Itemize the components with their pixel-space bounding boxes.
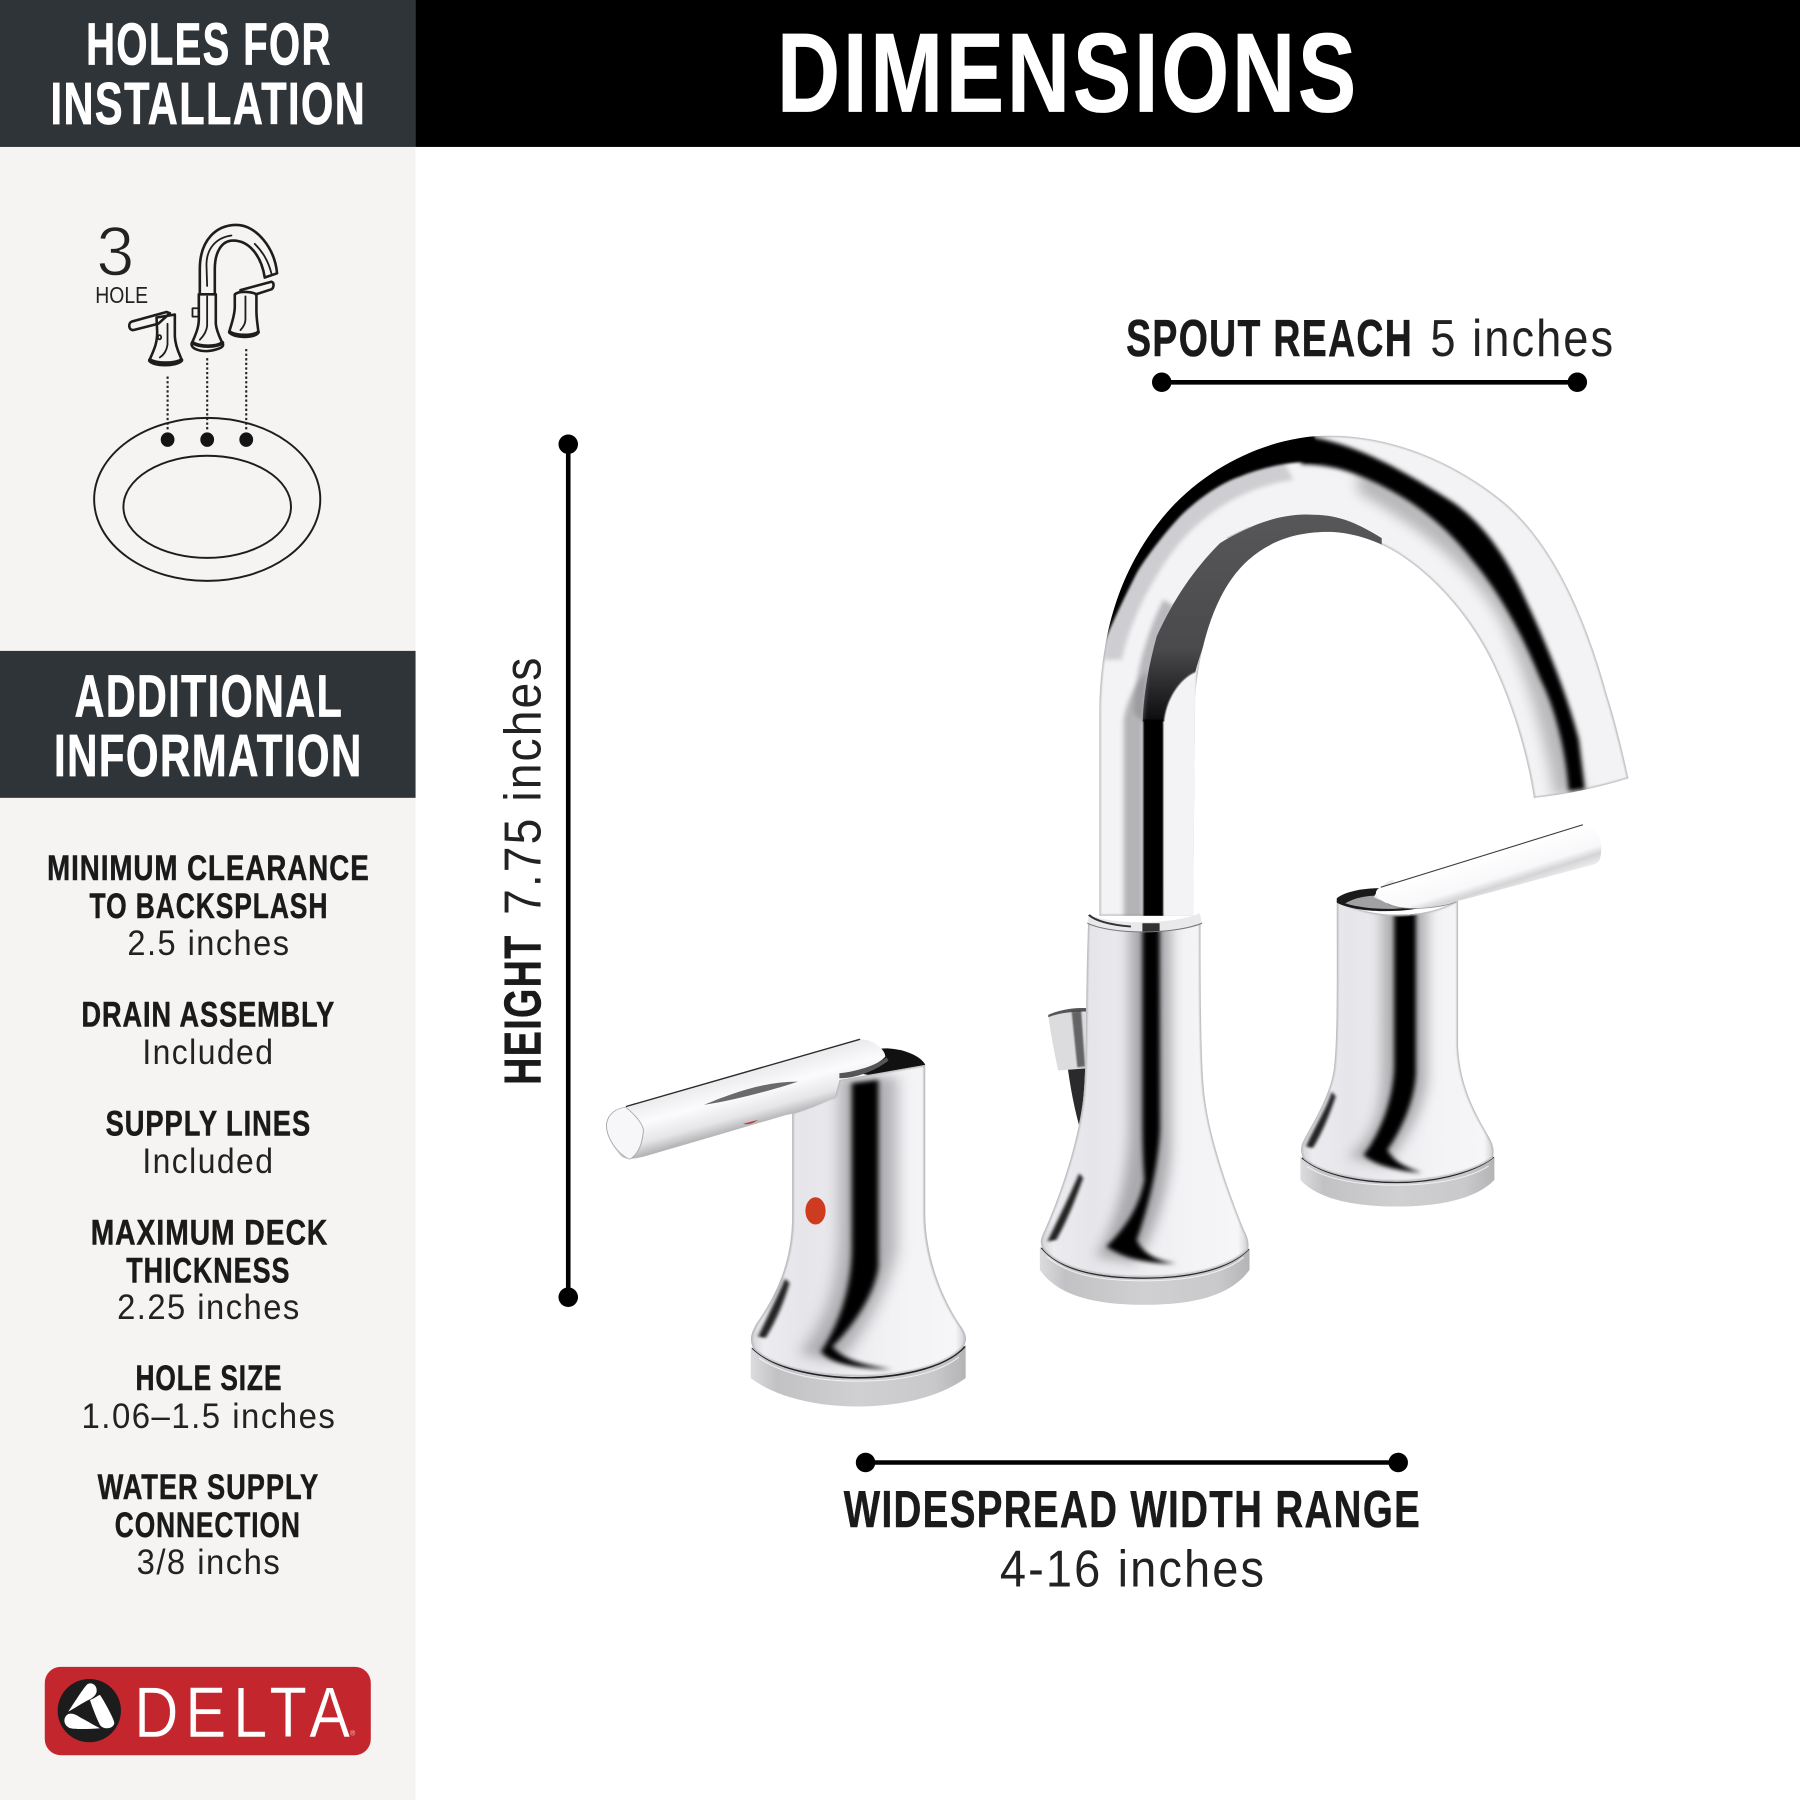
icon: delta logo <box>45 1667 371 1755</box>
faucet: center body with pop-up lever <box>1040 913 1250 1305</box>
spout inner shading in fine coordinates <box>1097 433 1382 723</box>
dimension: widespread width range: 4-16 inches <box>1000 1539 1266 1597</box>
text block: supply lines: SUPPLY LINES <box>106 1104 311 1143</box>
dimension: widespread width range <box>844 1453 1421 1597</box>
title: dimensions banner <box>416 0 1800 147</box>
text block: minimum clearance: TO BACKSPLASH <box>90 887 328 926</box>
panel: holes for installation header: INSTALLATION <box>51 70 366 137</box>
text block: water supply connection: CONNECTION <box>115 1506 301 1545</box>
dimension: height <box>494 435 578 1307</box>
faucet: arched spout <box>1097 433 1629 918</box>
text block: hole size: 1.06–1.5 inches <box>82 1397 336 1436</box>
dimension: spout reach <box>1126 309 1615 392</box>
icon: delta logo: ® <box>350 1730 355 1738</box>
text block: drain assembly: DRAIN ASSEMBLY <box>82 995 335 1034</box>
text block: drain assembly: Included <box>142 1033 274 1072</box>
text block: maximum deck thickness: THICKNESS <box>126 1251 290 1290</box>
text block: hole size <box>82 1359 336 1436</box>
red hot indicator <box>805 1197 826 1225</box>
icon: three hole sink diagram <box>94 213 320 581</box>
text block: minimum clearance: MINIMUM CLEARANCE <box>47 849 370 888</box>
text block: hole size: HOLE SIZE <box>135 1359 282 1398</box>
text block: drain assembly <box>82 995 335 1072</box>
dimension: height: 7.75 inches <box>494 655 552 915</box>
text block: maximum deck thickness: 2.25 inches <box>117 1288 301 1327</box>
icon: three hole sink diagram: HOLE <box>95 282 148 308</box>
panel: sidebar <box>0 0 416 1800</box>
text block: supply lines: Included <box>142 1142 274 1181</box>
text block: minimum clearance <box>47 849 370 963</box>
icon: three hole sink diagram: 3 <box>96 213 134 291</box>
icon: delta logo: DELTA <box>134 1674 357 1753</box>
panel: additional information header: ADDITIONAL <box>75 662 343 729</box>
faucet: left handle with red hot indicator <box>606 1039 966 1406</box>
handle lever <box>606 1039 889 1159</box>
faucet: right handle <box>1300 825 1601 1206</box>
panel: holes for installation header <box>0 0 416 147</box>
pop-up drain lever <box>1048 1008 1088 1147</box>
text block: maximum deck thickness: MAXIMUM DECK <box>91 1213 328 1252</box>
dimension: spout reach: 5 inches <box>1430 309 1615 367</box>
panel: holes for installation header: HOLES FOR <box>86 10 332 77</box>
dimension: widespread width range: WIDESPREAD WIDTH RANGE <box>844 1480 1421 1538</box>
dimension: spout reach: SPOUT REACH <box>1126 309 1413 367</box>
text block: maximum deck thickness <box>91 1213 328 1327</box>
panel: additional information header: INFORMATION <box>54 722 363 789</box>
text block: water supply connection <box>98 1468 319 1582</box>
title: dimensions banner: DIMENSIONS <box>777 9 1359 135</box>
panel: additional information header <box>0 651 416 798</box>
dimension: height: HEIGHT <box>494 934 552 1085</box>
text block: water supply connection: WATER SUPPLY <box>98 1468 319 1507</box>
illustration: chrome faucet <box>606 433 1629 1406</box>
text block: supply lines <box>106 1104 311 1181</box>
text block: water supply connection: 3/8 inchs <box>137 1543 281 1582</box>
text block: minimum clearance: 2.5 inches <box>127 924 290 963</box>
